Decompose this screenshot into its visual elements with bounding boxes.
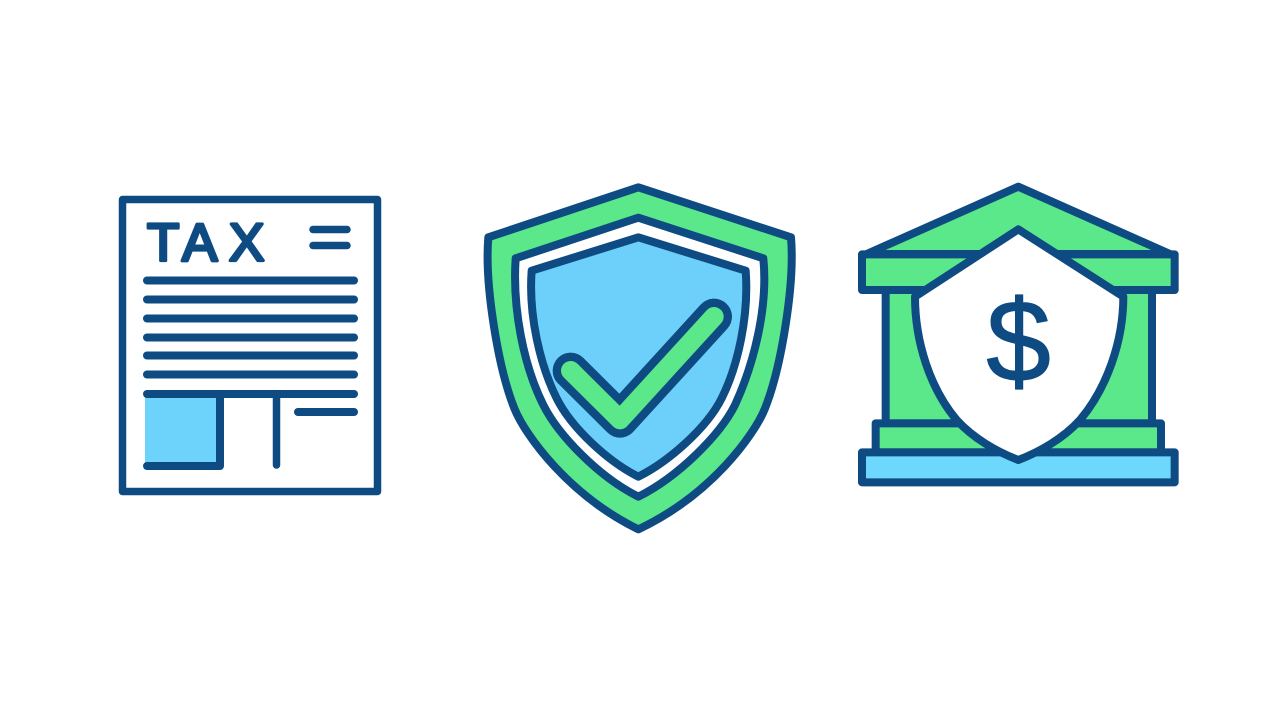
inner blue shield [531, 237, 746, 477]
icon: shield with check mark [488, 187, 792, 529]
document page [122, 200, 378, 492]
dollar shield [915, 229, 1123, 460]
table lines [147, 394, 354, 466]
heading: TAX: TAX [147, 214, 264, 272]
equals mark [313, 230, 347, 246]
text lines [147, 280, 354, 374]
check mark [571, 317, 714, 420]
plinth [876, 423, 1161, 452]
blue base [862, 452, 1175, 482]
white shield band [515, 218, 764, 497]
icon: tax document [122, 200, 378, 492]
columns [886, 290, 1152, 423]
dollar sign: $ [986, 276, 1051, 406]
blue table cell [145, 394, 220, 466]
outer shield [488, 187, 792, 529]
roof [867, 187, 1170, 254]
bank building [862, 187, 1175, 482]
icon: bank with dollar shield [862, 187, 1175, 482]
entablature [862, 254, 1175, 290]
